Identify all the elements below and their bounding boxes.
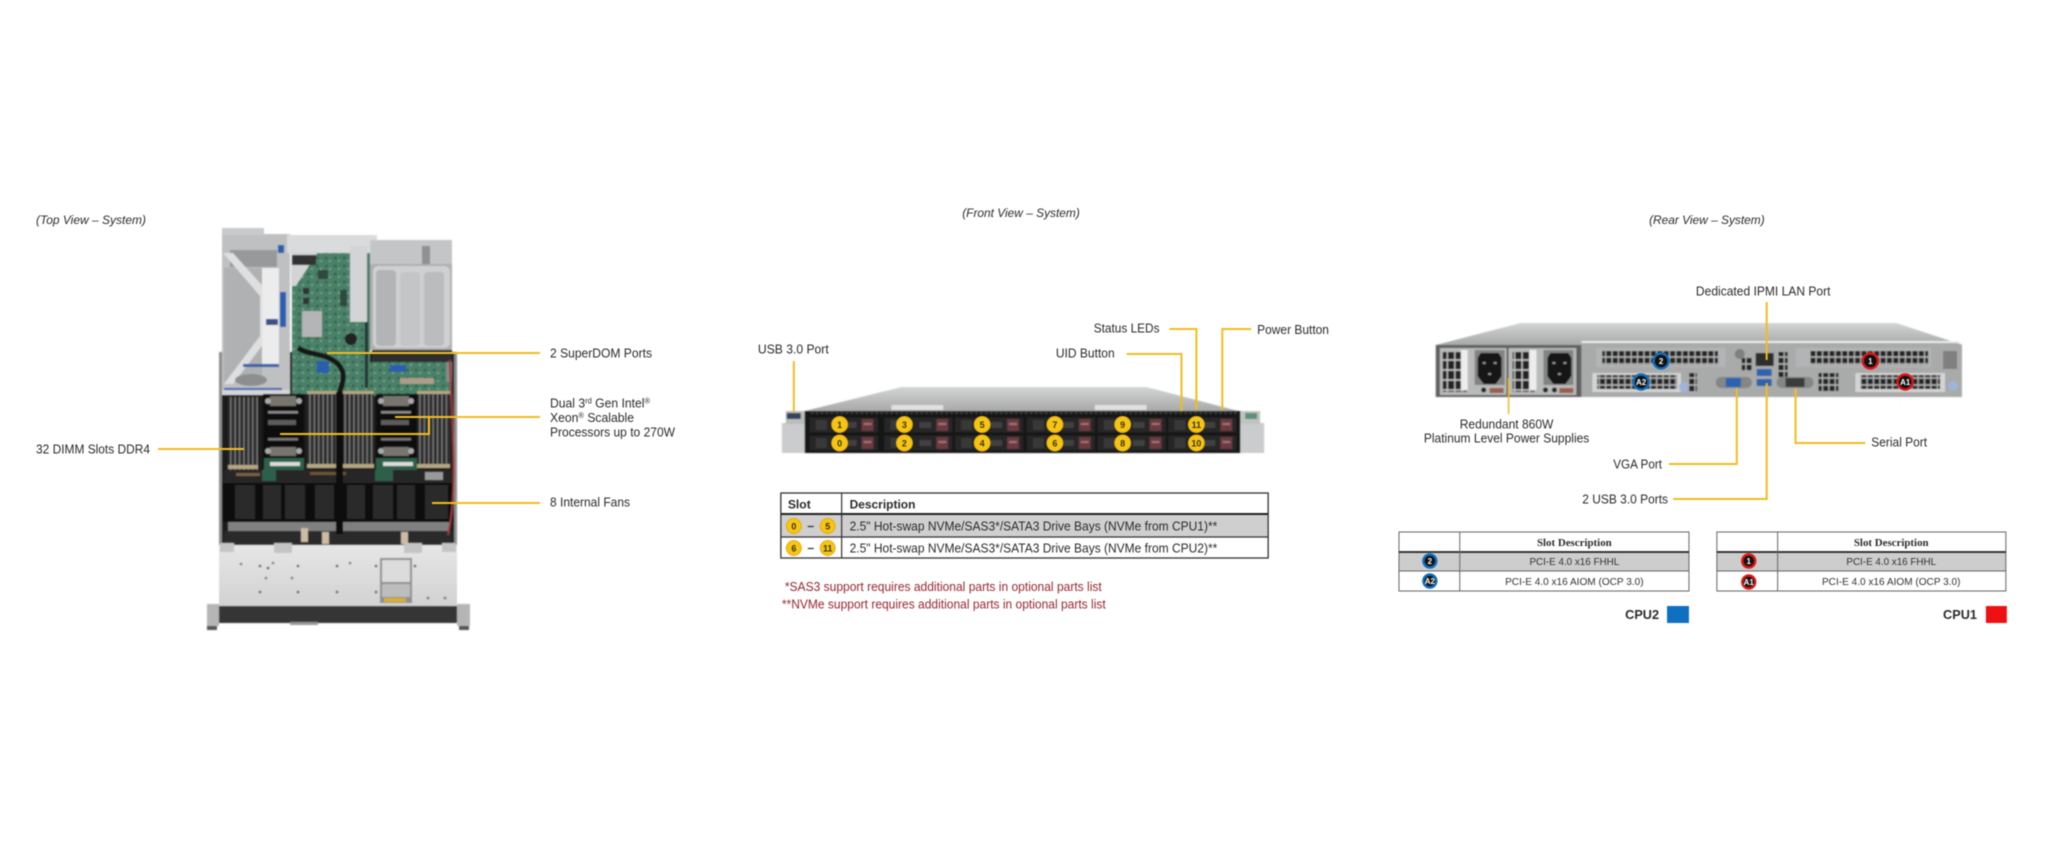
slot range badges xyxy=(786,518,835,556)
drive bay table: 2.5" Hot-swap NVMe/SAS3*/SATA3 Drive Bays (NVMe from CPU2)** xyxy=(850,541,1217,556)
callout: VGA port xyxy=(1613,388,1737,472)
callout: processors: rd xyxy=(585,396,592,406)
slot range badges: 5 xyxy=(825,521,830,532)
drive bay table: 2.5" Hot-swap NVMe/SAS3*/SATA3 Drive Bays (NVMe from CPU1)** xyxy=(850,519,1217,534)
footnotes: **NVMe support requires additional parts in optional parts list xyxy=(782,597,1106,612)
CPU2 slot table xyxy=(1399,532,1689,591)
callout: USB 3.0 ports xyxy=(1582,383,1767,507)
callout: SuperDOM ports: 2 SuperDOM Ports xyxy=(550,346,652,360)
callout: power supplies: Redundant 860W xyxy=(1460,416,1554,432)
drive bay number badges: 8 xyxy=(1120,438,1125,449)
footnotes xyxy=(782,580,1106,612)
drive bay number badges: 10 xyxy=(1191,438,1201,449)
CPU1 slot table: Slot Description xyxy=(1854,537,1929,549)
cabling strip xyxy=(224,470,452,483)
rear I/O ports xyxy=(1716,349,1814,388)
callout: serial port xyxy=(1796,388,1927,450)
rear view server photo xyxy=(1436,323,1963,397)
heading: rear view: (Rear View – System) xyxy=(1649,213,1765,227)
drive bay number badges xyxy=(832,416,1204,451)
callout: processors: ® xyxy=(578,411,584,420)
callout: power button: Power Button xyxy=(1257,322,1329,337)
callout: IPMI LAN port: Dedicated IPMI LAN Port xyxy=(1696,283,1831,299)
callout: processors: Xeon xyxy=(550,410,580,425)
drive bay number badges: 3 xyxy=(902,420,907,430)
CPU1 slot badges: A1 xyxy=(1900,378,1911,387)
CPU1 slot table xyxy=(1717,532,2006,591)
CPU1 slot table: PCI-E 4.0 x16 AIOM (OCP 3.0) xyxy=(1822,577,1960,588)
CPU1 slot badges xyxy=(1863,354,1913,390)
right silver panel xyxy=(370,240,452,350)
drive bay number badges: 0 xyxy=(837,438,842,449)
callout: processors: ® xyxy=(644,396,650,406)
chassis lid xyxy=(219,543,457,606)
drive bay table: Slot xyxy=(788,497,811,512)
drive bay number badges: 9 xyxy=(1120,420,1125,430)
badges: 2 xyxy=(1428,557,1433,566)
PCI-E slots xyxy=(1592,348,1958,392)
callout: UID button: UID Button xyxy=(1056,345,1115,361)
CPU2 slot badges: A2 xyxy=(1636,378,1647,387)
footnotes: *SAS3 support requires additional parts in optional parts list xyxy=(785,580,1102,594)
drive bay number badges: 6 xyxy=(1052,438,1057,449)
callout: processors: Dual 3 xyxy=(550,396,588,410)
CPU2 slot badges xyxy=(1634,354,1669,390)
drive bay number badges: 1 xyxy=(837,420,842,430)
CPU1 slot badges: 1 xyxy=(1868,357,1873,366)
legend: CPU1 xyxy=(1943,606,2007,623)
drive bay number badges: 7 xyxy=(1052,420,1057,430)
front view server photo xyxy=(782,387,1264,453)
CPU2 slot table: PCI-E 4.0 x16 AIOM (OCP 3.0) xyxy=(1505,577,1644,588)
CPU2 slot table: Slot Description xyxy=(1537,537,1612,549)
drive bay number badges: 11 xyxy=(1192,420,1201,430)
callout: USB 3.0 ports: 2 USB 3.0 Ports xyxy=(1582,491,1668,507)
legend: CPU2: CPU2 xyxy=(1625,607,1659,622)
callout: USB 3.0 port xyxy=(758,341,829,412)
callout: VGA port: VGA Port xyxy=(1613,456,1662,472)
callout: internal fans: 8 Internal Fans xyxy=(550,494,630,510)
drive bay table xyxy=(781,493,1268,558)
callout: UID button xyxy=(1056,345,1181,411)
callout: power supplies: Platinum Level Power Supplies xyxy=(1424,430,1590,446)
power supplies xyxy=(1440,348,1576,395)
callout: status LEDs xyxy=(1094,320,1196,410)
badges xyxy=(1742,554,1755,588)
panel: front view xyxy=(758,206,1329,612)
slot range badges: 6 xyxy=(791,543,796,554)
badges: A1 xyxy=(1744,578,1754,587)
drive bay number badges: 5 xyxy=(980,420,985,430)
panel: rear view xyxy=(1399,213,2007,623)
callout: power button xyxy=(1222,322,1329,410)
callout: processors xyxy=(280,396,676,440)
callout: status LEDs: Status LEDs xyxy=(1094,320,1160,336)
slot range badges: 0 xyxy=(791,521,796,532)
CPU2 slot badges: 2 xyxy=(1659,357,1664,366)
internal fans xyxy=(222,483,454,522)
callout: processors: Processors up to 270W xyxy=(550,424,676,440)
CPU1 slot table: PCI-E 4.0 x16 FHHL xyxy=(1846,557,1936,568)
drive bay number badges: 2 xyxy=(902,438,907,449)
legend: CPU2 xyxy=(1625,606,1689,623)
callout: DIMM slots: 32 DIMM Slots DDR4 xyxy=(36,442,150,456)
callout: processors: Gen Intel xyxy=(592,396,645,410)
motherboard xyxy=(287,235,452,396)
callout: IPMI LAN port xyxy=(1696,283,1831,360)
legend: CPU1: CPU1 xyxy=(1943,607,1977,622)
CPU2 slot table: PCI-E 4.0 x16 FHHL xyxy=(1530,557,1619,568)
DIMM slots xyxy=(228,391,450,470)
front bezel and rack ears xyxy=(207,604,470,630)
badges xyxy=(1423,554,1436,588)
heading: front view: (Front View – System) xyxy=(962,206,1080,220)
heading: top view: (Top View – System) xyxy=(36,213,146,227)
badges: A2 xyxy=(1425,577,1436,586)
badges: 1 xyxy=(1747,557,1752,566)
callout: processors: Scalable xyxy=(584,410,634,425)
drive bay table: Description xyxy=(850,497,915,512)
callout: power supplies xyxy=(1424,378,1590,446)
top view chassis photo xyxy=(207,228,470,630)
drive bay number badges: 4 xyxy=(980,438,985,449)
CPU sockets xyxy=(263,394,417,471)
panel: top view xyxy=(36,213,676,630)
left riser xyxy=(222,228,290,395)
callout: USB 3.0 port: USB 3.0 Port xyxy=(758,341,829,357)
slot range badges: 11 xyxy=(823,543,832,554)
callout: serial port: Serial Port xyxy=(1871,434,1927,450)
